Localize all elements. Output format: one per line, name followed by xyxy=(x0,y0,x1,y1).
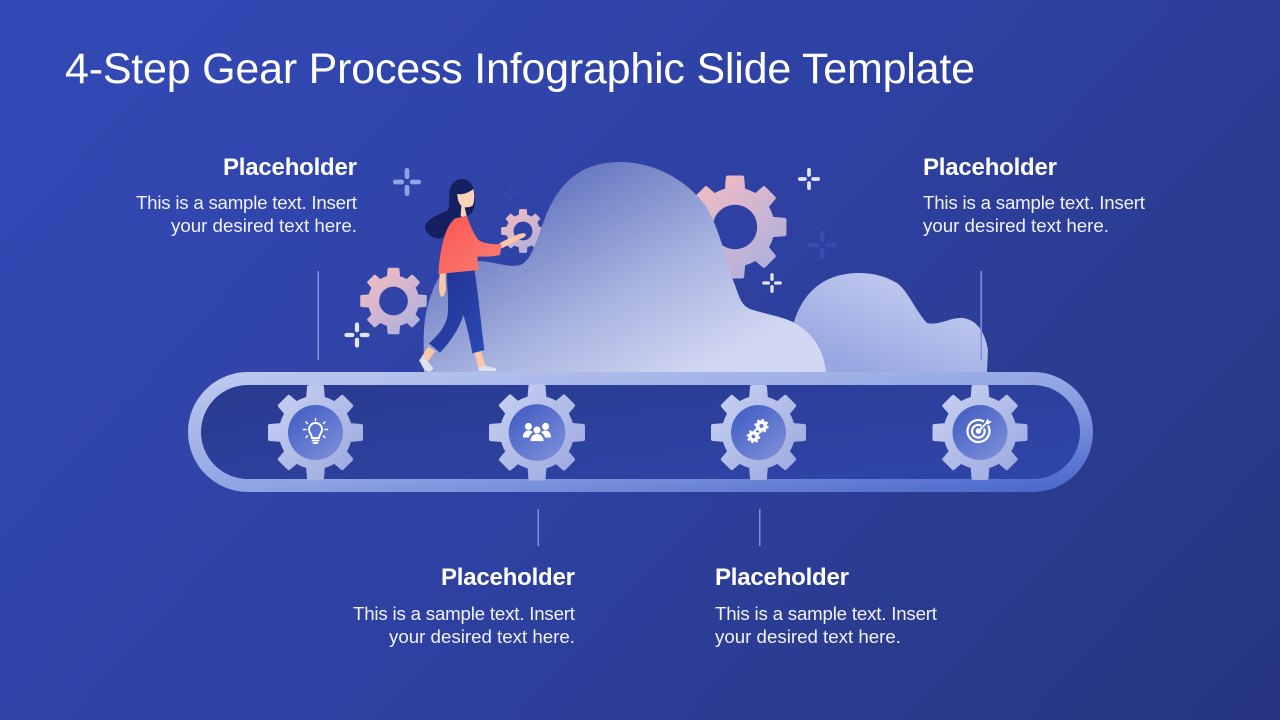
gear: small pink left xyxy=(358,266,428,336)
connector line 3 xyxy=(759,509,760,546)
cloud: large xyxy=(424,162,826,372)
gear: large pink xyxy=(696,176,786,278)
face and neck xyxy=(457,189,474,217)
text block: step 1 xyxy=(136,154,358,236)
text block: step 1: your desired text here. xyxy=(171,215,357,236)
conveyor belt xyxy=(194,378,1086,486)
connector line 4 xyxy=(980,271,982,360)
connector line 2 xyxy=(538,509,539,546)
gear 3: settings xyxy=(708,382,808,482)
icon: two gears xyxy=(748,420,768,442)
woman figure xyxy=(419,179,526,372)
skin legs xyxy=(421,347,486,368)
upper body xyxy=(425,179,526,274)
pants xyxy=(429,269,484,353)
text block: step 2: your desired text here. xyxy=(389,626,575,647)
icon: target xyxy=(967,418,992,442)
icon: people xyxy=(523,423,551,441)
cloud: small xyxy=(780,273,988,372)
title: 4-Step Gear Process Infographic Slide Template xyxy=(65,45,975,93)
connector line 1 xyxy=(318,271,319,360)
sparkle xyxy=(810,233,834,257)
gear 4: target xyxy=(930,382,1030,482)
left hand xyxy=(439,272,446,297)
text block: step 4: Placeholder xyxy=(923,154,1057,181)
decorative illustration xyxy=(346,162,988,372)
text block: step 2: Placeholder xyxy=(441,564,575,591)
lower body xyxy=(419,269,496,372)
text block: step 2 xyxy=(353,564,576,647)
hair xyxy=(425,179,475,239)
text block: step 2: This is a sample text. Insert xyxy=(353,603,576,624)
right hand xyxy=(499,233,526,248)
text block: step 1: This is a sample text. Insert xyxy=(136,192,358,213)
text block: step 4: This is a sample text. Insert xyxy=(923,192,1146,213)
text block: step 3: Placeholder xyxy=(715,564,849,591)
sparkle xyxy=(346,324,368,346)
text block: step 4 xyxy=(923,154,1146,236)
gear 2: team xyxy=(486,382,588,483)
gear 1: idea xyxy=(266,382,366,482)
sparkle xyxy=(395,170,419,194)
text block: step 4: your desired text here. xyxy=(923,215,1109,236)
icon: light bulb xyxy=(304,418,328,443)
shirt xyxy=(438,216,502,274)
text block: step 1: Placeholder xyxy=(223,154,357,181)
sparkle xyxy=(800,170,818,188)
text block: step 3: your desired text here. xyxy=(715,626,901,647)
shoes xyxy=(419,357,496,372)
text block: step 3 xyxy=(715,564,938,647)
gear: held by woman xyxy=(501,209,542,253)
sparkle xyxy=(504,187,518,201)
text block: step 3: This is a sample text. Insert xyxy=(715,603,938,624)
sparkle xyxy=(764,275,780,291)
